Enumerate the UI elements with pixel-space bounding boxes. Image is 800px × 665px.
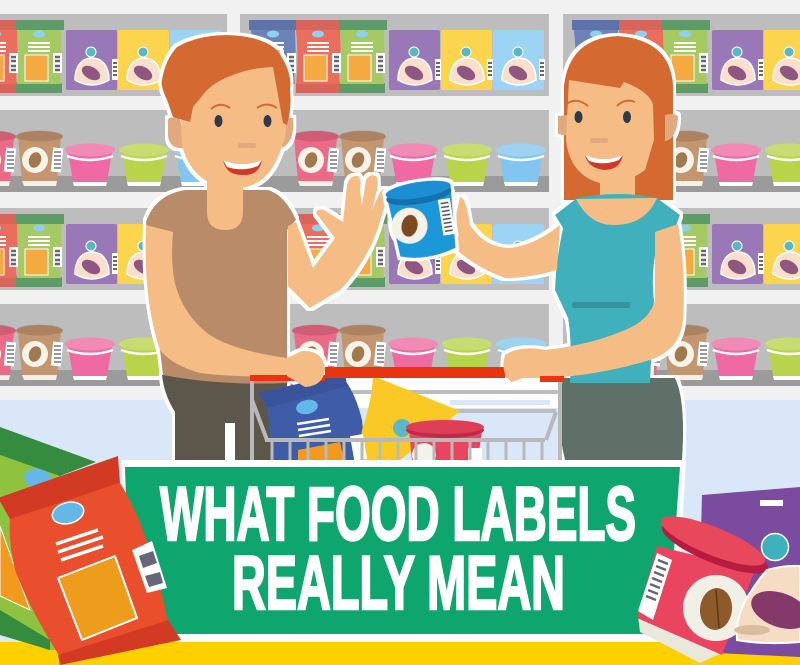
woman's hand on cart handle xyxy=(504,348,550,382)
red bag foreground xyxy=(0,456,181,665)
title: REALLY MEAN xyxy=(232,541,565,626)
man character xyxy=(146,35,388,460)
floor xyxy=(0,400,800,645)
woman character xyxy=(450,36,684,460)
shopping cart with groceries xyxy=(250,367,564,467)
green bag foreground xyxy=(0,427,135,650)
cream pouch window with cocoa bean xyxy=(734,566,800,643)
title xyxy=(160,472,636,626)
yellow foreground strip xyxy=(0,642,800,665)
man's hand on cart handle xyxy=(287,351,325,387)
blue coffee cup held by woman xyxy=(384,177,461,262)
red jar in cart xyxy=(406,420,484,467)
red coffee jar foreground xyxy=(637,507,773,663)
purple pouch foreground xyxy=(700,487,800,657)
blue bag in cart xyxy=(258,373,366,460)
yellow bag in cart xyxy=(350,376,460,461)
green title banner xyxy=(122,460,686,642)
